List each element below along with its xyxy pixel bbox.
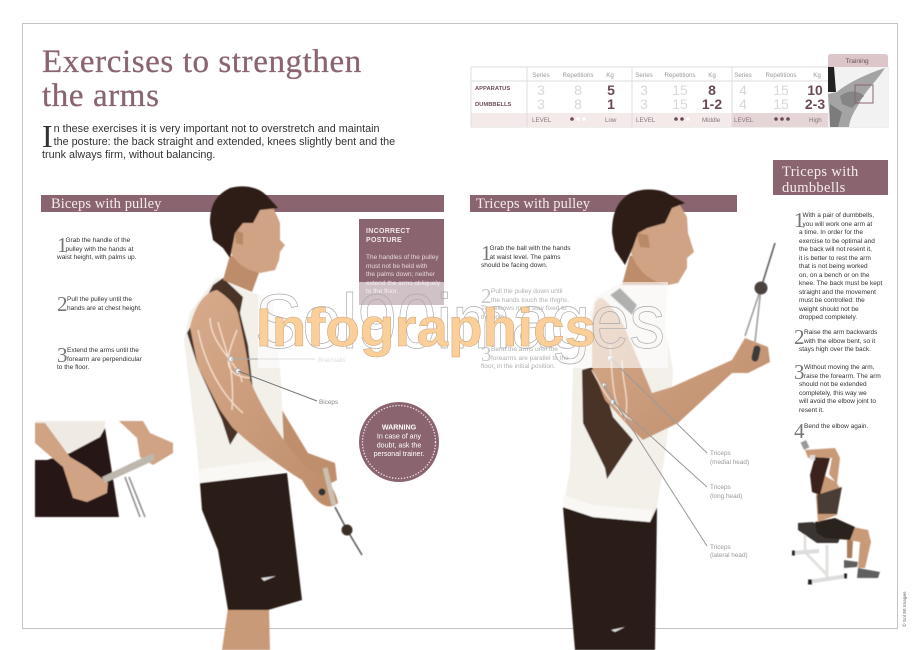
heading: biceps with pulley: Biceps with pulley	[51, 196, 162, 212]
table headers: Repetitions	[766, 72, 796, 79]
triceps step 2: The elbows must stay fixed to	[481, 305, 567, 312]
back muscle shading	[582, 367, 633, 479]
dumbbell step 4: 4	[794, 419, 804, 443]
dumbbell step 2: with the elbow bent, so it	[804, 338, 875, 344]
dumbbell step 1: exercise to be optimal and	[799, 238, 875, 244]
callout: triceps long head: (long head)	[710, 493, 742, 500]
weight values	[607, 82, 825, 112]
dumbbell step 3: 3	[794, 360, 804, 384]
training tab: Training	[845, 58, 869, 65]
table headers: Series	[532, 72, 550, 79]
dumbbell step 3: will avoid the elbow joint to	[799, 398, 876, 405]
dumbbell step 3: resent it.	[799, 406, 824, 414]
warning badge	[359, 402, 439, 482]
dumbbell step 1: a time. In order for the	[799, 229, 863, 236]
dumbbell step 1: With a pair of dumbbells,	[802, 212, 874, 219]
copyright: © Sol 90 Images	[901, 591, 908, 627]
photo: pulley handle detail	[35, 421, 173, 517]
heading: triceps with dumbbells	[773, 160, 888, 195]
dumbbell step 1: on, on a bench or on the	[799, 272, 869, 278]
level row	[532, 117, 822, 124]
warning badge: personal trainer.	[374, 450, 424, 458]
dumbbell step 2	[794, 325, 878, 353]
triceps step 2: the hands touch the thighs.	[491, 296, 569, 304]
heading: triceps with dumbbells: dumbbells	[782, 180, 846, 196]
title: the arms	[42, 78, 160, 114]
handle and cable	[755, 349, 757, 358]
level row: LEVEL	[734, 117, 754, 124]
table headers: Repetitions	[665, 72, 695, 79]
callout: biceps: Biceps	[319, 399, 338, 406]
level row: LEVEL	[636, 117, 656, 124]
arm with muscle lines	[190, 290, 338, 506]
incorrect posture callout	[359, 219, 444, 305]
light values: 3	[537, 82, 545, 98]
steps: triceps with pulley	[481, 241, 570, 370]
warning badge: In case of any	[377, 432, 422, 440]
dumbbell step 3: raise the forearm. The arm	[804, 372, 881, 380]
intro text: trunk always firm, without balancing.	[42, 149, 215, 161]
man: biceps exercise	[184, 186, 362, 650]
steps: biceps with pulley	[57, 233, 142, 371]
handle and cable	[325, 468, 334, 505]
dumbbell step 1: weight should not be	[799, 306, 859, 312]
warning badge: WARNING	[382, 424, 417, 432]
biceps step 1	[57, 233, 136, 261]
neck	[223, 255, 260, 292]
triceps step 2: the body.	[481, 314, 507, 320]
watermark: Infographics	[256, 298, 596, 358]
heading: triceps with pulley: Triceps with pulley	[476, 196, 590, 212]
dumbbell step 4: Bend the elbow again.	[804, 423, 868, 430]
watermark: Sol90images	[255, 279, 665, 365]
weight values: 2-3	[805, 96, 825, 112]
shorts	[815, 518, 855, 540]
dumbbell step 1	[794, 208, 882, 321]
biceps step 3	[57, 343, 142, 371]
biceps step 2	[57, 292, 142, 316]
callout: triceps lateral head: (lateral head)	[710, 552, 748, 559]
intro text: I	[42, 118, 53, 154]
intro text: the posture: the back straight and extended, knees slightly bent and the	[54, 136, 395, 148]
callout: triceps medial head: Triceps	[710, 450, 731, 457]
callout heading: INCORRECT	[366, 228, 410, 235]
callout: brachialis	[231, 357, 346, 364]
table headers: Kg	[813, 72, 821, 79]
callout: triceps long head	[613, 402, 742, 500]
biceps step 1: pulley with the hands at	[66, 246, 133, 252]
heading: biceps with pulley	[41, 195, 444, 212]
weight values: 1	[607, 96, 615, 112]
far arm	[272, 385, 337, 490]
dumbbell step 1: you will work one arm at	[802, 220, 872, 228]
triceps step 1	[481, 241, 570, 269]
row labels: APPARATUS	[475, 86, 510, 92]
callout text	[366, 254, 440, 295]
training photo	[828, 67, 888, 127]
triceps step 1: should be facing down.	[481, 262, 548, 269]
light values: 15	[672, 82, 688, 98]
table headers: Series	[734, 72, 752, 79]
callout text: The handles of the pulley	[366, 254, 439, 261]
torso	[816, 472, 841, 522]
man: triceps exercise	[563, 190, 775, 650]
light values: 3	[537, 96, 545, 112]
row labels: DUMBBELLS	[475, 102, 512, 108]
weight values: 10	[807, 82, 823, 98]
dumbbell step 3: Without moving the arm,	[804, 364, 874, 371]
callout heading: POSTURE	[366, 236, 402, 244]
dumbbell step 1: knee. The back must be kept	[799, 280, 882, 287]
biceps step 1: 1	[57, 233, 68, 257]
callout text: the palms down; neither	[366, 271, 435, 278]
dumbbell step 2: Raise the arm backwards	[804, 329, 877, 336]
title: Exercises to strengthen	[42, 44, 362, 80]
biceps step 2: Pull the pulley until the	[67, 296, 132, 303]
table headers: Repetitions	[563, 72, 593, 79]
hair	[210, 186, 278, 258]
triceps step 3	[481, 342, 569, 370]
level row: Low	[605, 117, 617, 124]
training tab	[828, 54, 888, 67]
light values: 3	[640, 82, 648, 98]
level row: Middle	[702, 117, 721, 124]
callout: triceps lateral head	[604, 385, 748, 559]
head	[225, 202, 285, 273]
biceps step 2: hands are at chest height.	[67, 304, 142, 312]
table headers	[532, 72, 821, 79]
light values: 4	[739, 96, 747, 112]
bench	[792, 522, 847, 582]
light values: 15	[672, 96, 688, 112]
triceps step 2: Pull the pulley down until	[491, 288, 563, 295]
triceps step 2	[481, 284, 569, 320]
weight values: 8	[708, 82, 716, 98]
table headers: Kg	[708, 72, 716, 79]
head	[630, 205, 694, 285]
light values: 15	[773, 82, 789, 98]
heading: triceps with pulley	[470, 195, 737, 212]
triceps step 2: 2	[481, 284, 492, 308]
triceps step 1: 1	[481, 241, 492, 265]
dumbbell step 1: that is not being worked	[799, 263, 868, 270]
callout: biceps	[238, 371, 338, 406]
woman on bench	[792, 440, 880, 582]
callout text: must not be held with	[366, 262, 427, 270]
callout text: extend the arms obliquely	[366, 280, 440, 286]
hair	[810, 457, 830, 495]
dumbbell step 2: stays high over the back.	[799, 346, 871, 353]
shirt	[184, 277, 285, 483]
dumbbell step 1: 1	[794, 208, 804, 232]
legs	[222, 608, 270, 650]
biceps step 3: 3	[57, 343, 68, 367]
arm with muscle lines	[592, 298, 770, 440]
callout: triceps medial head: (medial head)	[710, 459, 749, 466]
arms	[805, 448, 840, 484]
callout heading	[366, 228, 410, 244]
light values: 15	[773, 96, 789, 112]
weight values: 1-2	[702, 96, 722, 112]
callout: triceps long head: Triceps	[710, 484, 731, 491]
steps: triceps with dumbbells	[794, 208, 882, 443]
table headers: Kg	[606, 72, 614, 79]
shorts	[200, 473, 302, 610]
dumbbell step 1: the back will not resent it,	[799, 246, 872, 253]
back muscle shading	[187, 278, 253, 445]
callout: triceps lateral head: Triceps	[710, 544, 731, 551]
triceps step 3: 3	[481, 342, 492, 366]
biceps step 1: waist height, with palms up.	[57, 254, 136, 261]
triceps step 3: floor, in the initial position.	[481, 363, 555, 370]
biceps step 3: to the floor.	[57, 364, 89, 371]
intro text: n these exercises it is very important not to overstretch and maintain	[54, 123, 380, 135]
dumbbell step 1: straight and the movement	[799, 288, 876, 296]
title	[42, 44, 362, 114]
dumbbell step 1: it is better to rest the arm	[799, 254, 871, 262]
biceps step 3: forearm are perpendicular	[67, 356, 142, 362]
shorts	[563, 507, 657, 650]
light values	[537, 82, 789, 112]
light values: 8	[574, 82, 582, 98]
level row: High	[809, 117, 822, 124]
callout: brachialis: Brachialis	[318, 357, 346, 364]
light values: 4	[739, 82, 747, 98]
legs	[847, 540, 853, 558]
triceps step 3: forearms are parallel to the	[491, 354, 569, 362]
callout text: to the floor.	[366, 288, 398, 295]
triceps step 3: Bend the arms until the	[491, 346, 558, 353]
triceps step 1: at waist level. The palms	[490, 254, 561, 260]
biceps step 3: Extend the arms until the	[67, 347, 139, 354]
warning badge: doubt, ask the	[377, 442, 421, 450]
row labels	[475, 86, 512, 108]
light values: 3	[640, 96, 648, 112]
light values: 8	[574, 96, 582, 112]
dumbbell step 4	[794, 419, 868, 443]
triceps step 1: Grab the ball with the hands	[490, 245, 570, 252]
shirt	[563, 282, 673, 522]
level row: LEVEL	[532, 117, 552, 124]
biceps step 2: 2	[57, 292, 68, 316]
weight values: 5	[607, 82, 615, 98]
dumbbell step 3	[794, 360, 881, 414]
biceps step 1: Grab the handle of the	[66, 237, 130, 244]
hair	[612, 190, 685, 265]
callout: triceps medial head	[610, 358, 749, 466]
dumbbell step 3: should not be extended	[799, 381, 867, 388]
intro text	[42, 118, 395, 161]
heading: triceps with dumbbells: Triceps with	[782, 164, 859, 180]
dumbbell step 2: 2	[794, 325, 804, 349]
dumbbell step 3: completely, this way we	[799, 390, 867, 396]
neck	[622, 255, 668, 285]
table headers: Series	[635, 72, 653, 79]
dumbbell step 1: must be controlled: the	[799, 297, 865, 304]
dumbbell step 1: dropped completely.	[799, 314, 857, 321]
